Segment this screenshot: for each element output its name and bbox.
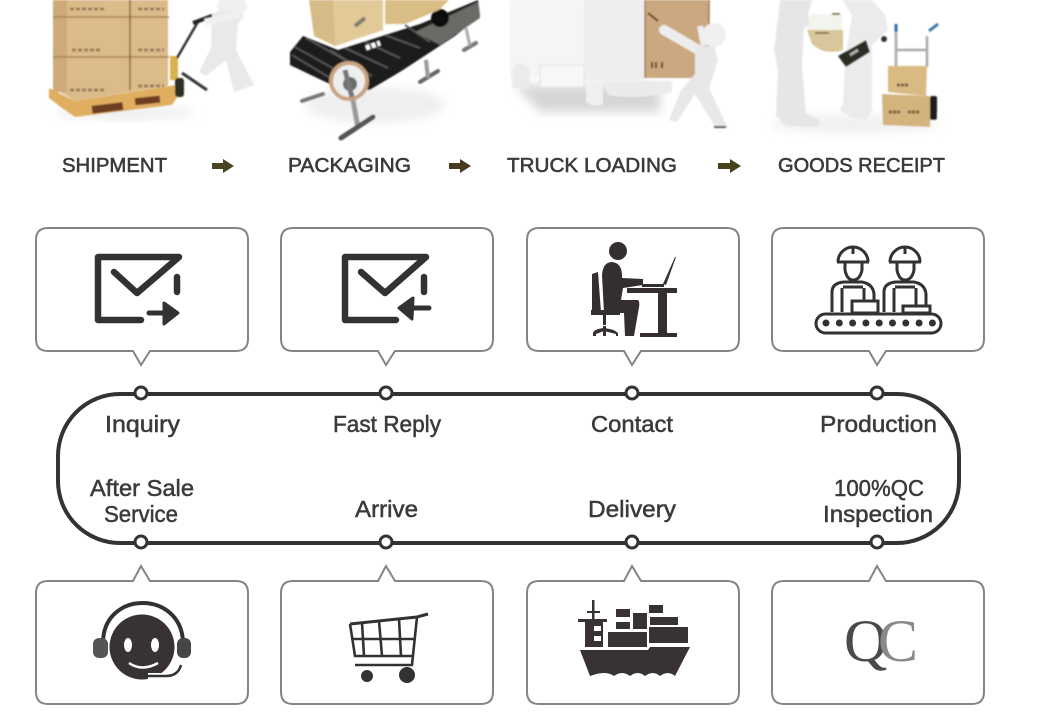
illustration: goods receipt xyxy=(770,0,940,133)
icon: smiling headset agent xyxy=(93,603,191,680)
callout: after sale service xyxy=(36,566,248,704)
label: inspection: Inspection xyxy=(823,501,933,527)
node: delivery xyxy=(626,536,638,548)
node: 100% QC inspection xyxy=(871,536,883,548)
label: contact: Contact xyxy=(591,411,674,437)
callout: delivery xyxy=(527,566,739,704)
icon: factory workers at conveyor xyxy=(816,246,941,333)
node: fast reply xyxy=(380,387,392,399)
callout: arrive xyxy=(281,566,493,704)
illustration: packaging conveyor xyxy=(290,0,480,138)
node: arrive xyxy=(380,536,392,548)
callout: production xyxy=(772,228,984,365)
label: inquiry: Inquiry xyxy=(105,411,181,437)
arrow: shipment to packaging xyxy=(212,159,234,173)
label: service: Service xyxy=(104,501,178,527)
label: shipment: SHIPMENT xyxy=(62,155,167,177)
icon: cargo ship xyxy=(578,600,690,676)
callout: inquiry xyxy=(36,228,248,365)
arrow: truck loading to goods receipt xyxy=(718,159,741,173)
label: fast reply: Fast Reply xyxy=(333,411,441,437)
illustration: truck loading xyxy=(510,0,728,128)
callout: fast reply xyxy=(281,228,493,365)
label: 100%QC: 100%QC xyxy=(834,475,924,501)
step labels row xyxy=(62,155,945,177)
icon: email received xyxy=(345,257,429,320)
node: inquiry xyxy=(135,387,147,399)
illustration: shipment pallet xyxy=(49,0,254,119)
node: production xyxy=(871,387,883,399)
label: goods receipt: GOODS RECEIPT xyxy=(778,155,945,177)
callout: quality control xyxy=(772,566,984,704)
node: contact xyxy=(626,387,638,399)
label: packaging: PACKAGING xyxy=(288,155,411,177)
icon: email sent xyxy=(98,257,179,324)
label: production: Production xyxy=(820,411,937,437)
node: after sale service xyxy=(135,536,147,548)
label: delivery: Delivery xyxy=(588,496,677,522)
arrow: packaging to truck loading xyxy=(449,159,471,173)
icon: shopping cart xyxy=(350,614,428,683)
callout: contact xyxy=(527,228,739,365)
flow track xyxy=(58,387,959,548)
label: truck loading: TRUCK LOADING xyxy=(507,155,677,177)
step names xyxy=(90,411,937,527)
label: after sale: After Sale xyxy=(90,475,194,501)
icon: person at laptop xyxy=(591,242,677,337)
icon: QC letters: QC xyxy=(844,608,918,674)
label: arrive: Arrive xyxy=(355,496,418,522)
